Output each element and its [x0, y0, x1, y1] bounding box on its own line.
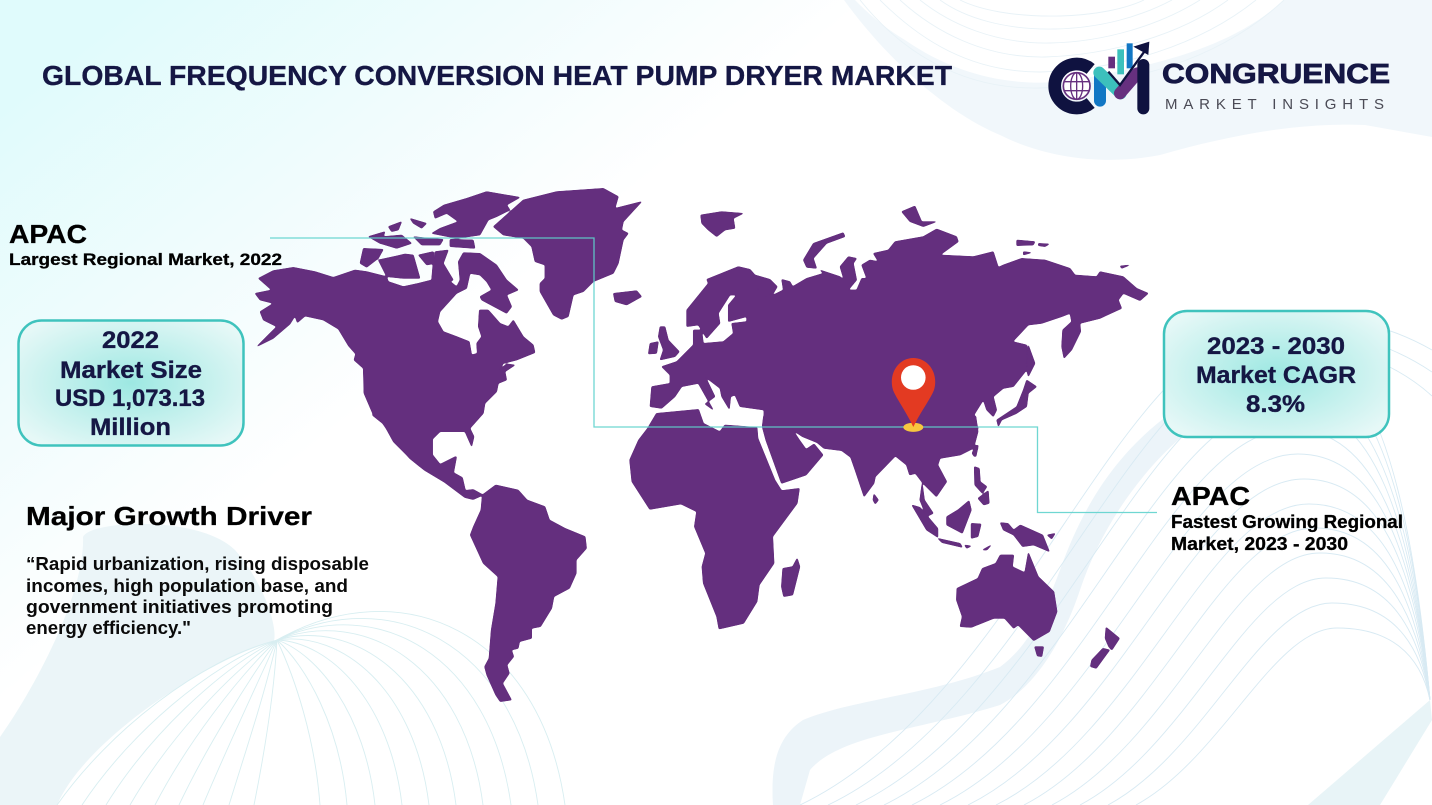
- map: North America and Arctic: [255, 188, 642, 467]
- panel: 2023-2030 CAGR: 8.3%: [1246, 391, 1305, 418]
- growth driver quote: energy efficiency.": [26, 618, 191, 638]
- connector lines: [270, 238, 1157, 512]
- world map: [255, 188, 1148, 702]
- title: GLOBAL FREQUENCY CONVERSION HEAT PUMP DRYER MARKET: [42, 60, 952, 91]
- text block: major growth driver: [26, 501, 369, 638]
- map: South America, Africa, South Asia, Oceania: [470, 409, 1119, 702]
- panel: 2022 market size: [18, 320, 244, 446]
- growth driver quote: government initiatives promoting: [26, 597, 333, 617]
- label: APAC fastest growing: [1171, 481, 1403, 554]
- map: Mexico and Central America: [373, 400, 482, 499]
- panel: 2022 market size: Million: [90, 414, 171, 441]
- logo wordmark: CONGRUENCE: [1162, 58, 1390, 89]
- map: Greenland: [493, 188, 642, 319]
- label subheading: Fastest Growing Regional: [1171, 512, 1403, 532]
- logo tagline: MARKET INSIGHTS: [1165, 96, 1384, 113]
- logo: [1055, 42, 1390, 113]
- panel: 2022 market size: Market Size: [60, 357, 202, 384]
- map: Iceland: [613, 291, 642, 305]
- decorative wave: top right: [844, 0, 1432, 160]
- panel: 2023-2030 CAGR: [1164, 311, 1389, 437]
- panel: 2023-2030 CAGR: 2023 - 2030: [1207, 333, 1345, 360]
- label subheading: [1171, 512, 1403, 554]
- panel: 2022 market size: 2022: [102, 327, 159, 354]
- label heading: APAC: [9, 219, 87, 249]
- label subheading: Market, 2023 - 2030: [1171, 534, 1348, 554]
- panel: 2023-2030 CAGR: Market CAGR: [1196, 362, 1356, 389]
- map: Eurasia: [648, 206, 1148, 457]
- decorative wave: bottom left: [0, 524, 565, 805]
- logo mark: [1055, 42, 1149, 108]
- label: APAC largest regional market: [9, 219, 282, 269]
- growth driver quote: incomes, high population base, and: [26, 576, 348, 596]
- decorative wave: bottom right: [772, 314, 1432, 805]
- icon: location pin: [892, 358, 935, 432]
- growth driver heading: Major Growth Driver: [26, 501, 312, 531]
- label subheading: Largest Regional Market, 2022: [9, 250, 282, 269]
- growth driver quote: [26, 554, 369, 638]
- panel: 2022 market size: USD 1,073.13: [55, 385, 205, 412]
- label heading: APAC: [1171, 481, 1250, 511]
- growth driver quote: “Rapid urbanization, rising disposable: [26, 554, 369, 574]
